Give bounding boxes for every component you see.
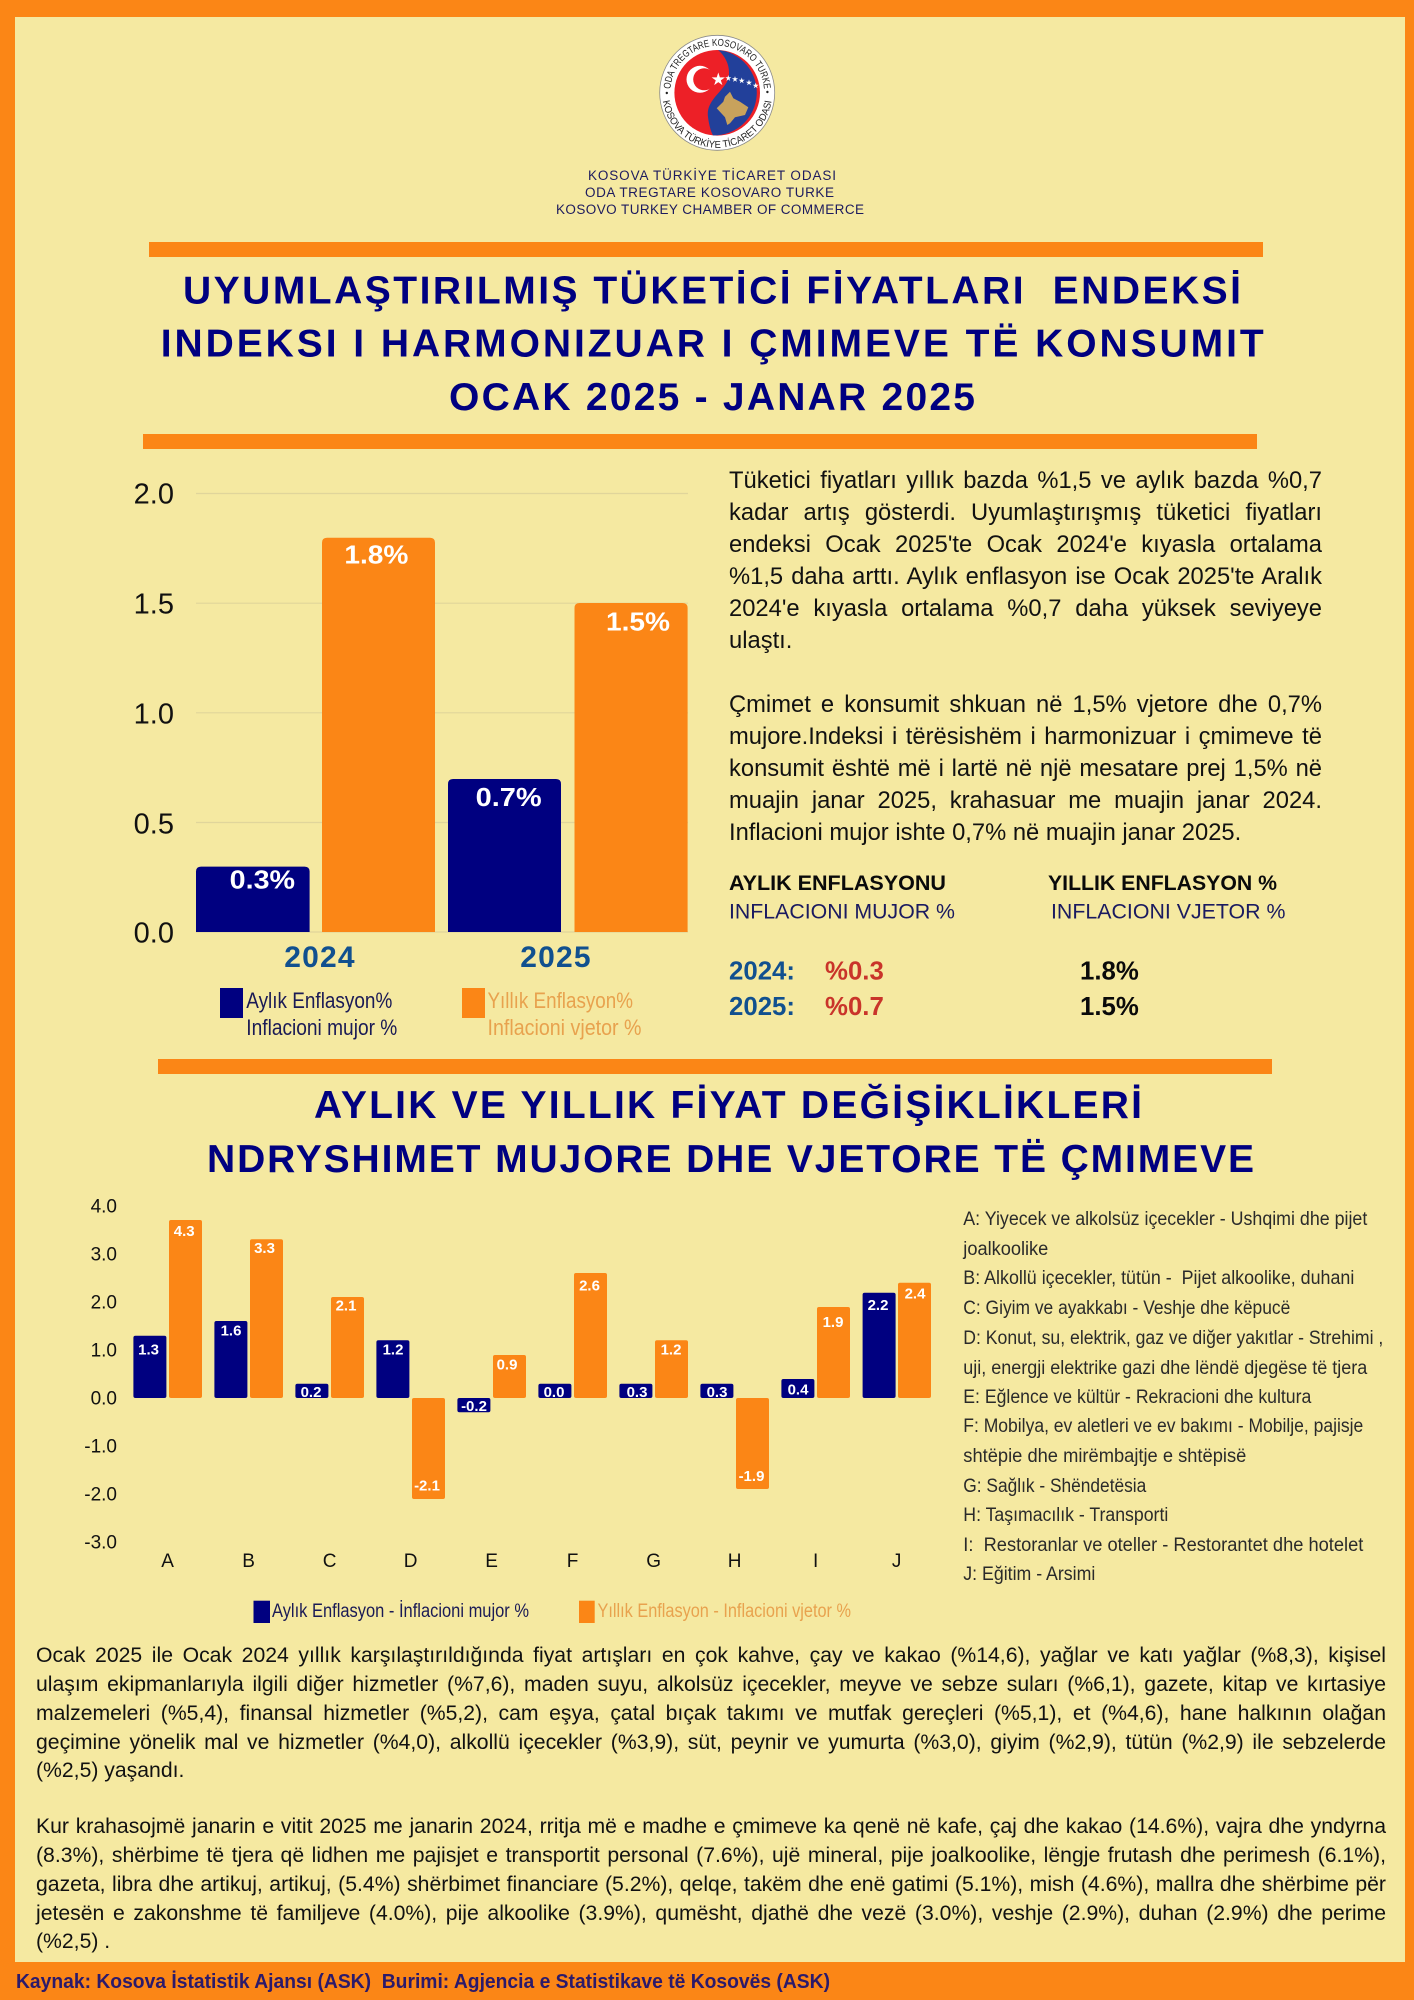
section title — [207, 1083, 1254, 1181]
inflation summary table — [729, 872, 1286, 1021]
monthly bars — [133, 1293, 896, 1412]
y axis labels: 2.0 — [134, 478, 174, 510]
main title — [161, 269, 1264, 419]
bar value labels: 2.4 — [905, 1286, 926, 1302]
third rule — [158, 1059, 1272, 1074]
top rule — [149, 242, 1263, 257]
text block: summary in Albanian: muajin janar 2025, krahasuar me muajin janar 2024. — [729, 787, 1322, 814]
category key: G: Sağlık - Shëndetësia — [963, 1476, 1147, 1497]
bar value labels: 4.3 — [174, 1223, 195, 1240]
inflation summary table: %0.3 — [825, 957, 884, 985]
category key: I: Restoranlar ve oteller - Restorantet dhe hotelet — [963, 1535, 1364, 1556]
category key: joalkoolike — [962, 1239, 1048, 1260]
bar value labels: 0.3 — [627, 1384, 647, 1401]
text block: details in Turkish: geçimine yönelik mal ve hizmetler (%4,0), alkollü içecekler (%3,9), süt, peynir ve yumurta (%3,0), giyim (%2,9), tütün (%2,9) ile sebzelerde — [36, 1731, 1386, 1754]
section title: AYLIK VE YILLIK FİYAT DEĞİŞİKLİKLERİ — [314, 1083, 1142, 1127]
bar value labels: 1.9 — [823, 1314, 843, 1331]
bar value labels: 3.3 — [254, 1240, 275, 1257]
y axis labels: 1.0 — [134, 698, 174, 730]
main title: UYUMLAŞTIRILMIŞ TÜKETİCİ FİYATLARI ENDEKSİ — [183, 269, 1241, 312]
y axis labels: 4.0 — [91, 1196, 117, 1218]
section title: NDRYSHIMET MUJORE DHE VJETORE TË ÇMIMEVE — [207, 1138, 1254, 1181]
bars 2024 annual — [322, 538, 435, 932]
y axis labels: 1.0 — [91, 1340, 117, 1362]
bar value labels: 0.3% — [230, 864, 295, 894]
text block: summary in Turkish: 2024'e kıyasla ortalama %0,7 daha yüksek seviyeye — [729, 595, 1322, 622]
bar value labels: 1.8% — [344, 539, 408, 569]
inflation summary table: INFLACIONI MUJOR % — [729, 900, 955, 923]
category labels: I — [813, 1551, 818, 1572]
bar value labels: 1.2 — [661, 1342, 681, 1358]
inflation summary table: 2025: — [729, 993, 795, 1021]
bar chart: monthly and annual inflation — [134, 478, 688, 1040]
main title: OCAK 2025 - JANAR 2025 — [449, 376, 975, 419]
category key: C: Giyim ve ayakkabı - Veshje dhe këpucë — [963, 1298, 1290, 1319]
chart legend: Yıllık Enflasyon% — [488, 988, 633, 1013]
chart legend: Aylık Enflasyon% — [246, 988, 392, 1013]
category key: shtëpie dhe mirëmbajtje e shtëpisë — [963, 1446, 1246, 1467]
chart legend: Inflacioni vjetor % — [488, 1015, 642, 1040]
bar chart: price changes by category — [84, 1196, 931, 1623]
text block: details in Albanian: jetesën e zakonshme të familjeve (4.0%), pije alkoolike (3.9%), qumësht, djathë dhe vezë (3.0%), veshje (2.9%), duhan (2.9%) dhe perime — [36, 1902, 1386, 1925]
text block: summary in Turkish: ulaştı. — [729, 627, 792, 654]
text block: details in Albanian — [36, 1815, 1386, 1953]
text block: details in Turkish: ulaşım ekipmanlarıyla ilgili diğer hizmetler (%7,6), maden suyu, alkolsüz içecekler, meyve ve sebze suları (%6,1), gazete, kitap ve kırtasiye — [36, 1673, 1386, 1696]
text block: summary in Turkish — [729, 467, 1322, 654]
text block: details in Turkish: malzemeleri (%5,4), finansal hizmetler (%5,2), cam eşya, çatal bıçak takımı ve mutfak gereçleri (%5,1), et (%4,6), hane halkının olağan — [36, 1702, 1386, 1725]
text block: summary in Albanian — [729, 691, 1322, 846]
chart legend — [254, 1601, 851, 1623]
text block: details in Turkish: Ocak 2025 ile Ocak 2024 yıllık karşılaştırıldığında fiyat artışları en çok kahve, çay ve kakao (%14,6), yağlar ve katı yağlar (%8,3), kişisel — [36, 1644, 1386, 1667]
y axis labels — [134, 478, 174, 950]
y axis labels: 1.5 — [134, 588, 174, 620]
category key: A: Yiyecek ve alkolsüz içecekler - Ushqimi dhe pijet — [963, 1209, 1368, 1230]
y axis labels: -3.0 — [84, 1532, 117, 1554]
bars 2024 monthly — [196, 867, 310, 932]
text block: summary in Albanian: konsumit është më i lartë në një mesatare prej 1,5% në — [729, 755, 1322, 782]
bar value labels: -1.9 — [739, 1468, 764, 1485]
chart legend: Aylık Enflasyon - İnflacioni mujor % — [272, 1601, 529, 1622]
category key: B: Alkollü içecekler, tütün - Pijet alkoolike, duhani — [963, 1268, 1354, 1289]
inflation summary table: 1.5% — [1080, 993, 1139, 1021]
bar value labels: -0.2 — [461, 1398, 487, 1415]
category labels: E — [485, 1551, 498, 1572]
text block: details in Albanian: Kur krahasojmë janarin e vitit 2025 me janarin 2024, rritja më e madhe e çmimeve ka qenë në kafe, çaj dhe kakao (14.6%), vajra dhe yndyrna — [36, 1815, 1386, 1838]
icon: chamber logo — [659, 34, 776, 151]
category labels: A — [161, 1551, 174, 1572]
bar value labels: 2.6 — [579, 1278, 600, 1294]
bar value labels: 1.6 — [221, 1322, 241, 1340]
text block: details in Albanian: gazeta, libra dhe artikuj, artikuj, (5.4%) shërbimet financiare (5.2%), qelqe, takëm dhe enë gatimi (5.1%), mish (4.6%), mallra dhe shërbime për — [36, 1873, 1386, 1896]
y axis labels: -1.0 — [84, 1436, 117, 1458]
category labels: H — [728, 1551, 741, 1572]
y axis labels: 3.0 — [91, 1244, 117, 1266]
category labels: G — [646, 1551, 661, 1572]
bars 2025 annual — [574, 603, 688, 932]
bar value labels: 0.7% — [476, 782, 542, 812]
category labels: D — [404, 1551, 417, 1572]
text block: details in Albanian: (%2,5) . — [36, 1930, 110, 1953]
bar value labels: 2.1 — [336, 1298, 356, 1314]
text block: summary in Albanian: Çmimet e konsumit shkuan në 1,5% vjetore dhe 0,7% — [729, 691, 1322, 718]
main title: INDEKSI I HARMONIZUAR I ÇMIMEVE TË KONSUMIT — [161, 323, 1264, 366]
text block: summary in Turkish: kadar artış gösterdi. Uyumlaştırışmış tüketici fiyatları — [729, 499, 1322, 526]
year labels: 2025 — [520, 941, 592, 974]
category labels: C — [323, 1551, 336, 1572]
bar value labels: -2.1 — [414, 1478, 440, 1494]
text block: summary in Albanian: Inflacioni mujor ishte 0,7% në muajin janar 2025. — [729, 819, 1241, 846]
bar value labels: 1.5% — [606, 606, 670, 636]
text block: summary in Turkish: Tüketici fiyatları yıllık bazda %1,5 ve aylık bazda %0,7 — [729, 467, 1322, 494]
category labels: B — [242, 1551, 255, 1572]
bar value labels: 0.0 — [544, 1384, 564, 1401]
bar value labels: 0.3 — [707, 1384, 727, 1401]
bar value labels: 1.2 — [383, 1342, 403, 1358]
year labels — [284, 941, 592, 974]
icon: chamber logo: KOSOVA TÜRKİYE TİCARET ODASI — [662, 100, 772, 148]
bar value labels: 0.9 — [497, 1356, 517, 1374]
text block: details in Albanian: (8.3%), shërbime të tjera që lidhen me pajisjet e transportit personal (7.6%), ujë mineral, pije joalkoolike, lëngje frutash dhe perimesh (6.1%), — [36, 1844, 1386, 1867]
bar value labels: 0.2 — [301, 1384, 321, 1401]
category labels: F — [567, 1551, 578, 1572]
text block: details in Turkish: (%2,5) yaşandı. — [36, 1759, 184, 1782]
category key: E: Eğlence ve kültür - Rekracioni dhe kultura — [963, 1387, 1312, 1408]
bars 2025 monthly — [448, 779, 561, 932]
organisation names: KOSOVA TÜRKİYE TİCARET ODASI — [588, 168, 836, 183]
organisation names: ODA TREGTARE KOSOVARO TURKE — [585, 185, 834, 200]
bar value labels: 2.2 — [868, 1297, 888, 1314]
annual bars — [169, 1220, 931, 1499]
category labels — [161, 1551, 901, 1572]
category labels: J — [892, 1551, 901, 1572]
text block: details in Turkish — [36, 1644, 1386, 1782]
category key: uji, energji elektrike gazi dhe lëndë djegëse të tjera — [963, 1358, 1368, 1379]
text block: summary in Albanian: mujore.Indeksi i tërësishëm i harmonizuar i çmimeve të — [729, 723, 1322, 750]
inflation summary table: %0.7 — [825, 993, 884, 1021]
inflation summary table: 2024: — [729, 957, 795, 985]
inflation summary table: YILLIK ENFLASYON % — [1048, 872, 1277, 895]
text block: summary in Turkish: endeksi Ocak 2025'te Ocak 2024'e kıyasla ortalama — [729, 531, 1322, 558]
inflation summary table: INFLACIONI VJETOR % — [1051, 900, 1286, 923]
chart legend: Inflacioni mujor % — [246, 1015, 397, 1040]
second rule — [143, 434, 1257, 449]
text block: summary in Turkish: %1,5 daha arttı. Aylık enflasyon ise Ocak 2025'te Aralık — [729, 563, 1322, 590]
category key: H: Taşımacılık - Transporti — [963, 1505, 1168, 1526]
inflation summary table: 1.8% — [1080, 957, 1139, 985]
y axis labels: 0.0 — [91, 1388, 117, 1410]
chart legend: Yıllık Enflasyon - Inflacioni vjetor % — [598, 1601, 851, 1622]
category key: J: Eğitim - Arsimi — [963, 1564, 1095, 1585]
icon: chamber logo: ODA TREGTARE KOSOVARO TURKE — [664, 38, 771, 89]
chart legend — [220, 988, 642, 1040]
bar value labels — [230, 539, 670, 894]
organisation names — [556, 168, 864, 217]
category key: D: Konut, su, elektrik, gaz ve diğer yakıtlar - Strehimi , — [963, 1328, 1383, 1349]
year labels: 2024 — [284, 941, 356, 974]
bar value labels: 1.3 — [138, 1342, 159, 1358]
inflation summary table: AYLIK ENFLASYONU — [729, 872, 946, 895]
y axis labels: 2.0 — [91, 1292, 117, 1314]
organisation names: KOSOVO TURKEY CHAMBER OF COMMERCE — [556, 202, 864, 217]
category key — [962, 1209, 1383, 1585]
bar value labels: 0.4 — [788, 1382, 809, 1398]
y axis labels: 0.0 — [134, 918, 174, 950]
category key: F: Mobilya, ev aletleri ve ev bakımı - Mobilje, pajisje — [963, 1416, 1363, 1437]
y axis labels: -2.0 — [84, 1484, 117, 1506]
bar value labels — [138, 1223, 926, 1494]
source footer: Kaynak: Kosova İstatistik Ajansı (ASK) Burimi: Agjencia e Statistikave të Kosovës (ASK) — [16, 1970, 830, 1993]
y axis labels: 0.5 — [134, 808, 174, 840]
y axis labels — [84, 1196, 117, 1554]
